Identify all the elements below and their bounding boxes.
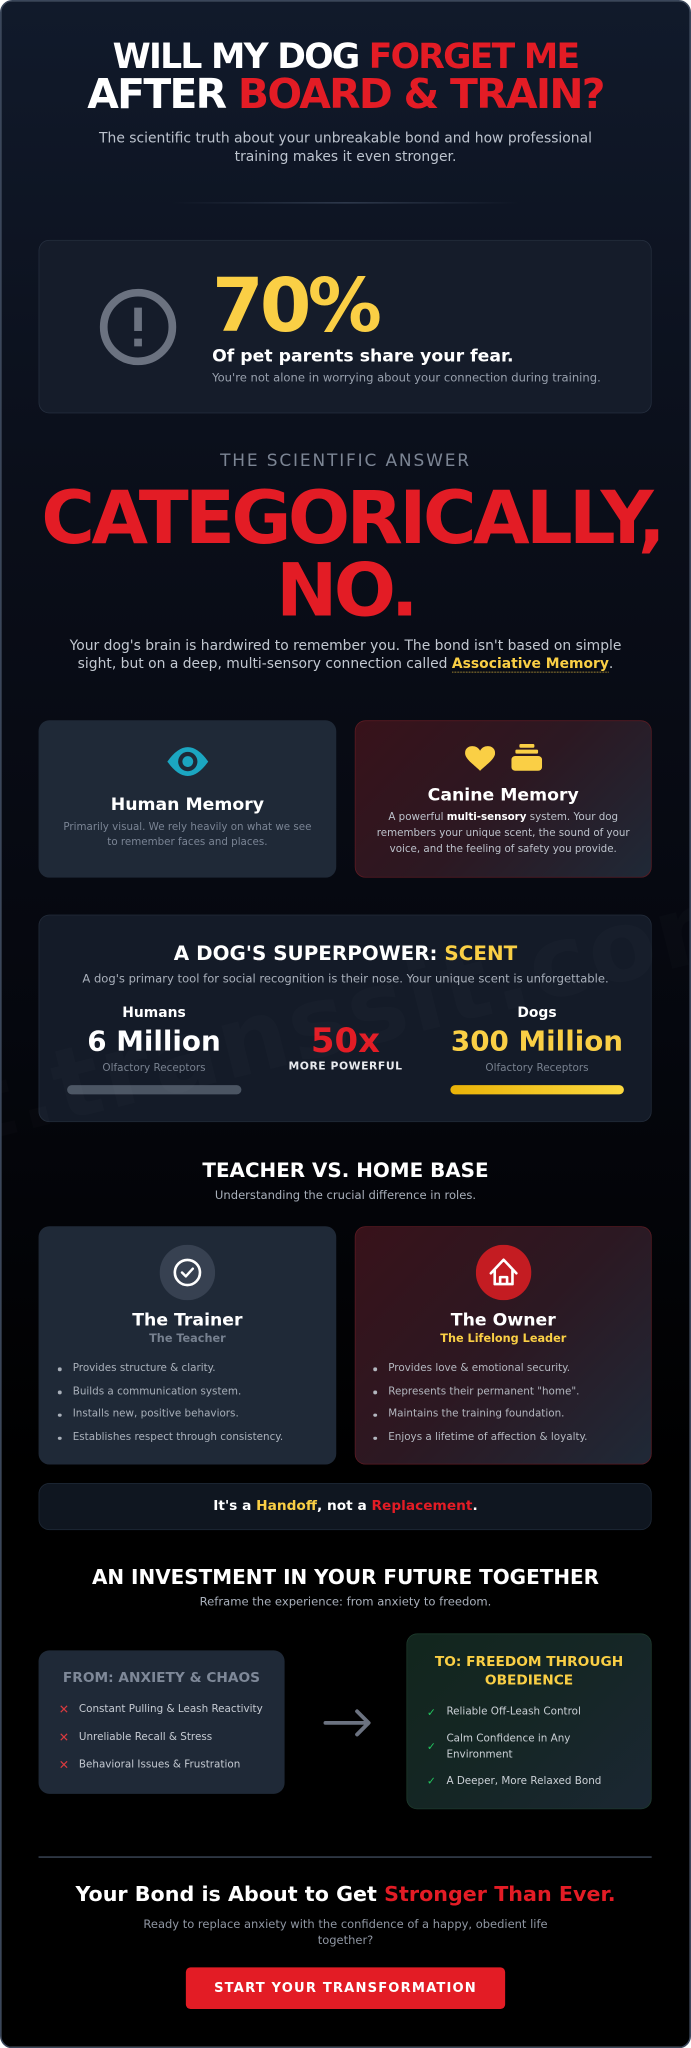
list item xyxy=(446,1733,570,1761)
panel: canine memory xyxy=(355,720,652,877)
arrow: from to to xyxy=(324,1709,371,1736)
body text: Primarily visual. We rely heavily on what we see xyxy=(63,821,311,833)
answer explanation: Your dog's brain is hardwired to remember you. The bond isn't based on simple xyxy=(70,637,621,654)
heading: A DOG'S SUPERPOWER: SCENT xyxy=(174,942,517,966)
card subtitle: The Lifelong Leader xyxy=(440,1332,566,1345)
card subtitle: The Teacher xyxy=(149,1332,226,1345)
icon: exclamation circle xyxy=(100,288,176,366)
card title: The Owner xyxy=(451,1310,556,1330)
card title: The Trainer xyxy=(132,1310,243,1330)
multiplier caption: MORE POWERFUL xyxy=(288,1061,403,1073)
check icon: ✓ xyxy=(427,1706,436,1719)
answer explanation: sight, but on a deep, multi-sensory connection called Associative Memory. xyxy=(78,656,613,672)
body text xyxy=(63,821,311,849)
cross icon: ✕ xyxy=(59,1702,69,1717)
panel heading: TO: FREEDOM THROUGH xyxy=(435,1653,623,1670)
body text: A powerful multi-sensory system. Your dog xyxy=(388,812,618,823)
section subtitle: Reframe the experience: from anxiety to freedom. xyxy=(200,1595,491,1609)
check icon: ✓ xyxy=(427,1775,436,1788)
list item: Unreliable Recall & Stress xyxy=(79,1732,212,1743)
panel: the trainer xyxy=(39,1226,336,1464)
icon: check badge xyxy=(160,1245,215,1300)
panel: from anxiety xyxy=(39,1650,285,1794)
call to action button xyxy=(186,1967,505,2009)
owner list item: Represents their permanent "home". xyxy=(388,1386,579,1397)
statistic 70%: 70% xyxy=(212,262,378,348)
panel: the owner xyxy=(355,1226,652,1464)
callout text: It's a Handoff, not a Replacement. xyxy=(213,1497,478,1514)
humans column: value: 6 Million xyxy=(87,1026,221,1057)
panel: 70 percent statistic xyxy=(39,240,652,414)
list item: Calm Confidence in Any xyxy=(446,1733,570,1744)
icon: heart xyxy=(465,746,496,771)
panel heading: FROM: ANXIETY & CHAOS xyxy=(63,1669,260,1686)
owner list item: Enjoys a lifetime of affection & loyalty. xyxy=(388,1432,587,1443)
icon: eye xyxy=(167,747,208,776)
closing text: together? xyxy=(318,1933,373,1947)
check icon: ✓ xyxy=(427,1741,436,1753)
dogs column: label: Dogs xyxy=(517,1005,557,1021)
dogs bar xyxy=(450,1085,624,1095)
trainer list item: Establishes respect through consistency. xyxy=(73,1432,283,1443)
list item: Behavioral Issues & Frustration xyxy=(79,1759,240,1771)
answer explanation xyxy=(70,637,621,672)
body text: remembers your unique scent, the sound of your xyxy=(377,828,630,839)
trainer list: Provides structure & clarity. xyxy=(73,1363,216,1374)
humans column: label: Humans xyxy=(122,1005,186,1021)
owner list: Provides love & emotional security. xyxy=(388,1363,570,1374)
owner list item: Maintains the training foundation. xyxy=(388,1409,564,1420)
heading: Human Memory xyxy=(111,794,264,814)
list item: Constant Pulling & Leash Reactivity xyxy=(79,1704,263,1715)
trainer list item: Builds a communication system. xyxy=(73,1386,241,1397)
heading: Canine Memory xyxy=(428,785,579,805)
subtitle: The scientific truth about your unbreakable bond and how professional xyxy=(99,130,592,146)
panel: scent superpower xyxy=(39,914,652,1122)
section subtitle: Understanding the crucial difference in roles. xyxy=(215,1188,476,1202)
subtitle xyxy=(98,130,592,165)
body text: voice, and the feeling of safety you provide. xyxy=(390,844,617,855)
heading: investment: AN INVESTMENT IN YOUR FUTURE TOGETHER xyxy=(92,1567,599,1590)
cross icon: ✕ xyxy=(59,1758,69,1772)
closing text: Ready to replace anxiety with the confidence of a happy, obedient life xyxy=(143,1918,548,1931)
dogs column: unit: Olfactory Receptors xyxy=(485,1062,589,1074)
list item: A Deeper, More Relaxed Bond xyxy=(446,1775,601,1787)
trainer list item: Installs new, positive behaviors. xyxy=(73,1409,239,1420)
statistic caption: Of pet parents share your fear. xyxy=(212,346,514,367)
title xyxy=(87,36,604,118)
subtitle: training makes it even stronger. xyxy=(235,149,456,165)
heading: teacher vs home base: TEACHER VS. HOME BASE xyxy=(202,1159,489,1182)
panel: to freedom xyxy=(407,1633,652,1809)
callout: handoff xyxy=(39,1483,652,1530)
icon: jar xyxy=(511,744,542,771)
icon: home badge xyxy=(476,1244,532,1300)
body text xyxy=(377,812,630,855)
button label: START YOUR TRANSFORMATION xyxy=(214,1980,477,1996)
section label: THE SCIENTIFIC ANSWER xyxy=(220,451,471,471)
description: A dog's primary tool for social recognition is their nose. Your unique scent is unforgettable. xyxy=(82,971,609,985)
answer headline: CATEGORICALLY, xyxy=(41,476,662,560)
cross icon: ✕ xyxy=(59,1730,69,1745)
panel heading: OBEDIENCE xyxy=(485,1672,573,1688)
list item: Environment xyxy=(446,1749,513,1761)
statistic note: You're not alone in worrying about your connection during training. xyxy=(212,371,601,385)
title: WILL MY DOG FORGET ME xyxy=(113,36,578,76)
dogs column: value: 300 Million xyxy=(451,1026,623,1057)
list item: Reliable Off-Leash Control xyxy=(446,1706,581,1718)
answer headline: NO. xyxy=(276,548,415,633)
closing text xyxy=(143,1918,548,1947)
title: AFTER BOARD & TRAIN? xyxy=(87,71,604,118)
closing headline: Your Bond is About to Get Stronger Than Ever. xyxy=(75,1883,616,1907)
humans bar xyxy=(67,1085,241,1095)
humans column: unit: Olfactory Receptors xyxy=(102,1062,206,1074)
answer headline xyxy=(41,476,662,633)
multiplier: 50x xyxy=(311,1021,380,1060)
panel: human memory xyxy=(39,720,336,877)
panel heading xyxy=(434,1653,623,1688)
body text: to remember faces and places. xyxy=(107,837,267,849)
